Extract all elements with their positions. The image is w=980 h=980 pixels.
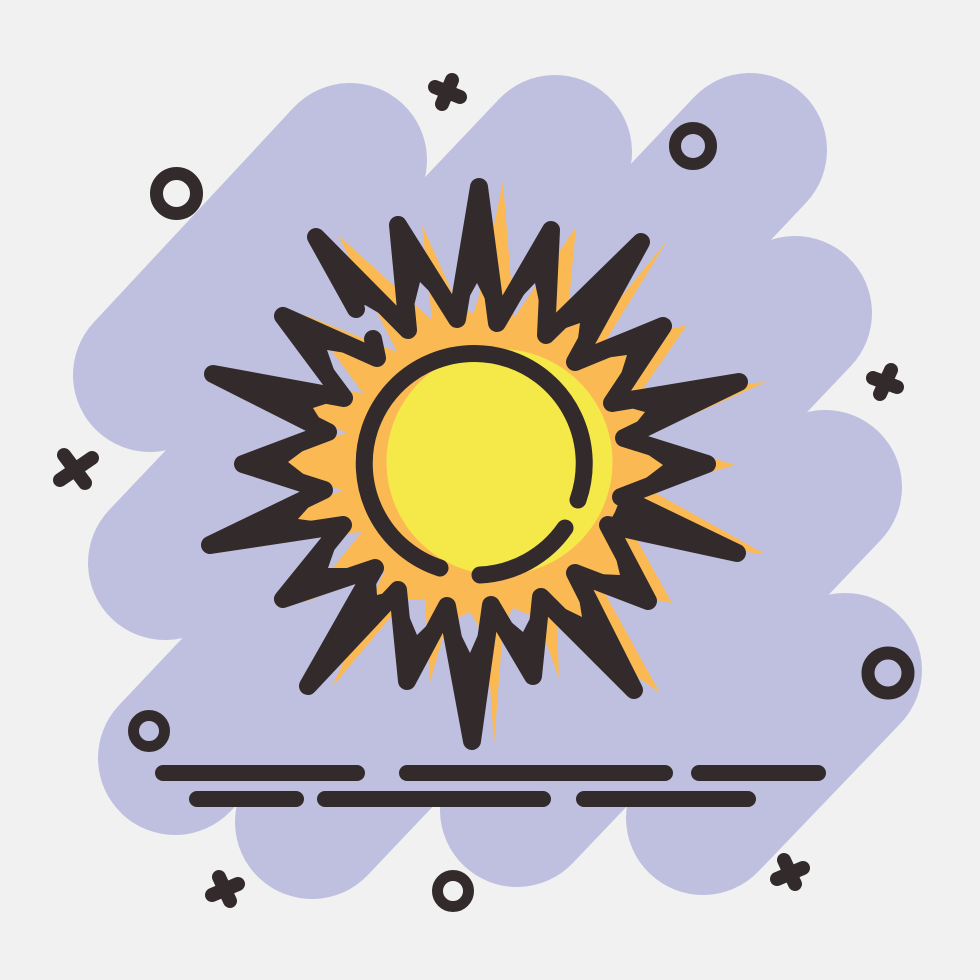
sun ray outline [210,187,739,741]
lavender comic blob [150,150,845,822]
sun rays solid fill [210,187,739,741]
yellow sun disc [386,349,612,575]
orange sun rays [213,182,766,745]
water lines [163,773,818,799]
sun disc outline [364,353,584,575]
decorative rings [134,128,908,906]
decorative crosses [60,80,897,901]
